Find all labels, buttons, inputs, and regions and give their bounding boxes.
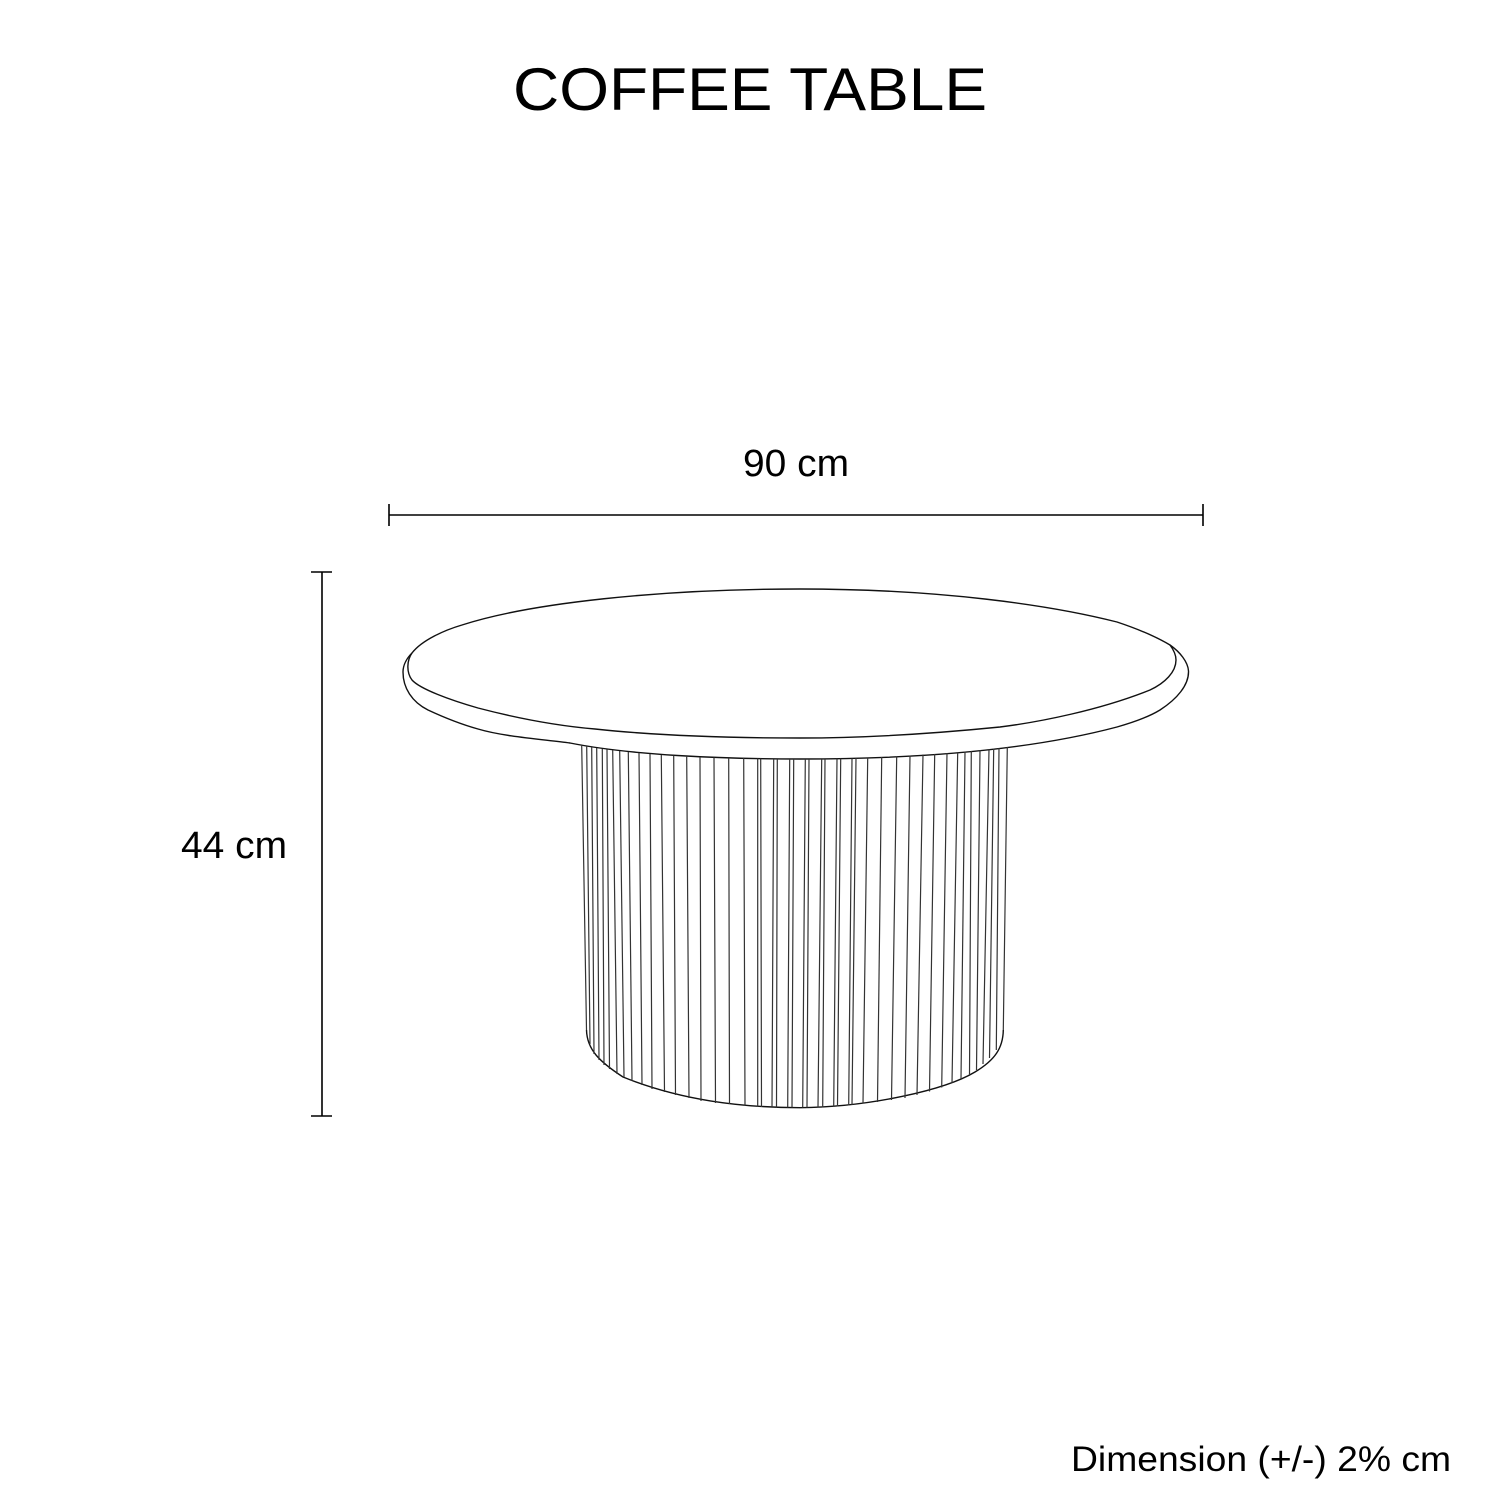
height dimension arrow <box>311 572 332 1116</box>
fluted base outline <box>586 1030 1003 1108</box>
fluted base ribs <box>582 745 1007 1108</box>
title: COFFEE TABLE <box>513 56 987 123</box>
table top <box>403 589 1189 759</box>
width dimension arrow <box>389 504 1203 526</box>
tolerance note: Dimension (+/-) 2% cm <box>1071 1440 1451 1479</box>
height dimension label: 44 cm <box>181 825 287 867</box>
coffee table line drawing <box>403 589 1189 1108</box>
width dimension label: 90 cm <box>743 443 849 485</box>
